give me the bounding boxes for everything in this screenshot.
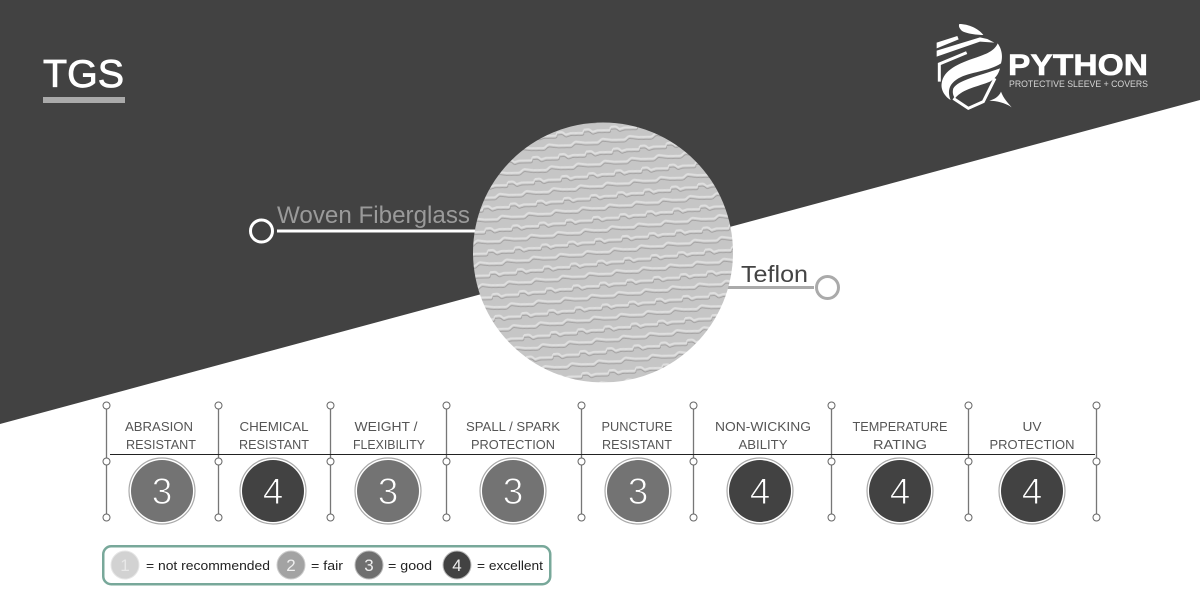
legend item: 2 fair <box>277 551 344 579</box>
column: puncture resistant: PUNCTURE <box>602 419 673 434</box>
column: temperature rating: RATING <box>873 437 927 452</box>
column: weight / flexibility: WEIGHT / <box>354 419 418 434</box>
legend item: 2 fair: 2 <box>286 556 296 575</box>
legend item: 3 good: = good <box>388 558 432 573</box>
column: UV protection: PROTECTION <box>990 437 1074 452</box>
column: UV protection: UV <box>1022 419 1042 434</box>
legend item: 1 not recommended: = not recommended <box>146 558 270 573</box>
dark diagonal background <box>0 0 1200 424</box>
title: TGS: TGS <box>43 53 124 96</box>
column: chemical resistant: 4 <box>263 471 283 512</box>
column: temperature rating: 4 <box>890 471 910 512</box>
fabric swatch circle <box>473 122 733 382</box>
column: chemical resistant: RESISTANT <box>239 437 309 452</box>
legend item: 4 excellent: 4 <box>452 556 462 575</box>
callout: Woven Fiberglass: Woven Fiberglass <box>277 202 470 229</box>
column: UV protection <box>990 419 1074 524</box>
legend item: 3 good <box>355 551 432 579</box>
legend item: 3 good: 3 <box>364 556 374 575</box>
column: non-wicking ability <box>715 419 811 524</box>
column: puncture resistant <box>602 419 673 524</box>
column: non-wicking ability: 4 <box>750 471 770 512</box>
column: abrasion resistant <box>125 419 196 524</box>
column: abrasion resistant: RESISTANT <box>126 437 196 452</box>
legend item: 4 excellent <box>443 551 543 579</box>
column: weight / flexibility: FLEXIBILITY <box>353 437 425 452</box>
ratings table <box>103 402 1100 524</box>
legend item: 2 fair: = fair <box>311 558 344 573</box>
column: temperature rating: TEMPERATURE <box>852 419 948 434</box>
column: weight / flexibility <box>353 419 425 524</box>
column: abrasion resistant: ABRASION <box>125 419 193 434</box>
column: puncture resistant: 3 <box>628 471 648 512</box>
column: spall / spark protection: 3 <box>503 471 523 512</box>
tagline: PROTECTIVE SLEEVE + COVERS <box>1009 79 1148 89</box>
column: non-wicking ability: ABILITY <box>738 437 788 452</box>
wordmark: PYTHON <box>1008 49 1148 82</box>
column: spall / spark protection: SPALL / SPARK <box>466 419 560 434</box>
column: chemical resistant: CHEMICAL <box>240 419 308 434</box>
callout: Woven Fiberglass <box>250 202 475 242</box>
column: UV protection: 4 <box>1022 471 1042 512</box>
legend item: 1 not recommended: 1 <box>120 556 130 575</box>
column: temperature rating <box>852 419 948 524</box>
callout: Teflon <box>725 261 838 298</box>
column: abrasion resistant: 3 <box>152 471 172 512</box>
column: weight / flexibility: 3 <box>378 471 398 512</box>
column: spall / spark protection <box>466 419 560 524</box>
column: non-wicking ability: NON-WICKING <box>715 419 811 434</box>
legend <box>103 546 550 584</box>
table frame lines <box>103 402 1100 521</box>
logo: Python protective sleeve + covers <box>937 24 1148 108</box>
legend item: 4 excellent: = excellent <box>477 558 543 573</box>
legend item: 1 not recommended <box>111 551 270 579</box>
column: puncture resistant: RESISTANT <box>602 437 672 452</box>
column: spall / spark protection: PROTECTION <box>471 437 555 452</box>
callout: Teflon: Teflon <box>741 261 808 287</box>
column: chemical resistant <box>239 419 309 524</box>
icon: wrapped hexagon shield <box>937 24 1012 108</box>
